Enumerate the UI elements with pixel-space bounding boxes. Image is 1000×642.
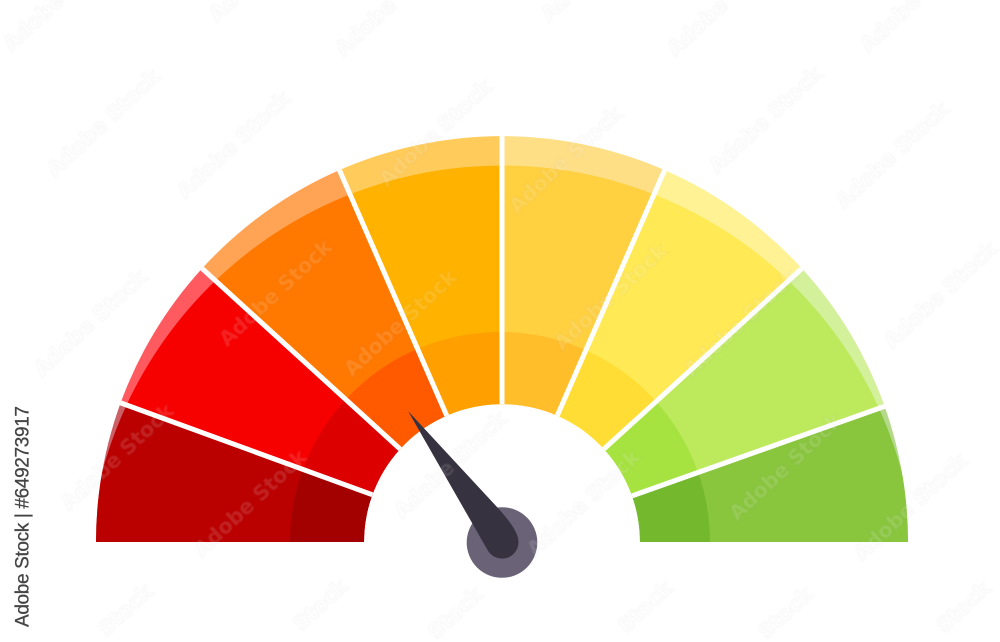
segment: dark red: [96, 404, 372, 542]
segment: orange: [202, 170, 447, 450]
watermark: Adobe Stock: [879, 236, 1000, 353]
watermark: Adobe Stock: [56, 398, 179, 515]
watermark: Adobe Stock: [679, 264, 802, 381]
watermark: Stock: [423, 581, 488, 642]
needle hub: [467, 507, 537, 578]
watermark: Adobe Stock: [549, 238, 672, 355]
watermark: Stock: [613, 575, 678, 638]
watermark: Adobe Stock: [724, 408, 847, 525]
gauge dial: [96, 136, 908, 542]
watermark: Stock: [93, 578, 158, 641]
segment: golden yellow: [502, 136, 664, 416]
watermark: Adobe Stock: [522, 444, 645, 561]
segment: amber: [340, 136, 502, 416]
watermark: Adobe Stock: [29, 264, 152, 381]
segment: yellow: [557, 170, 802, 450]
segment: green: [632, 406, 908, 542]
watermark: Adobe Stock: [339, 264, 462, 381]
watermark: Adobe Stock: [849, 448, 972, 565]
gauge infographic: [14, 136, 908, 628]
watermark: Adobe Stock: [704, 61, 827, 178]
watermark: Adobe Stock: [389, 406, 512, 523]
needle: [408, 411, 519, 559]
watermark: Stock: [753, 581, 818, 642]
watermark: Adobe Stock: [214, 234, 337, 351]
watermark: Adobe Stock: [42, 64, 165, 181]
watermark: Stock: [931, 575, 996, 638]
watermark: Adobe Stock: [831, 96, 954, 213]
segment: red: [120, 268, 400, 494]
watermark: Adobe Stock: [504, 101, 627, 218]
watermark: Adobe Stock: [172, 86, 295, 203]
watermark: Adobe Stock: [189, 444, 312, 561]
watermark: Stock: [288, 573, 353, 636]
watermark: Adobe Stock: [374, 74, 497, 191]
segment: lime: [604, 268, 885, 496]
stock id label: Adobe Stock | #649273917: [12, 406, 34, 627]
